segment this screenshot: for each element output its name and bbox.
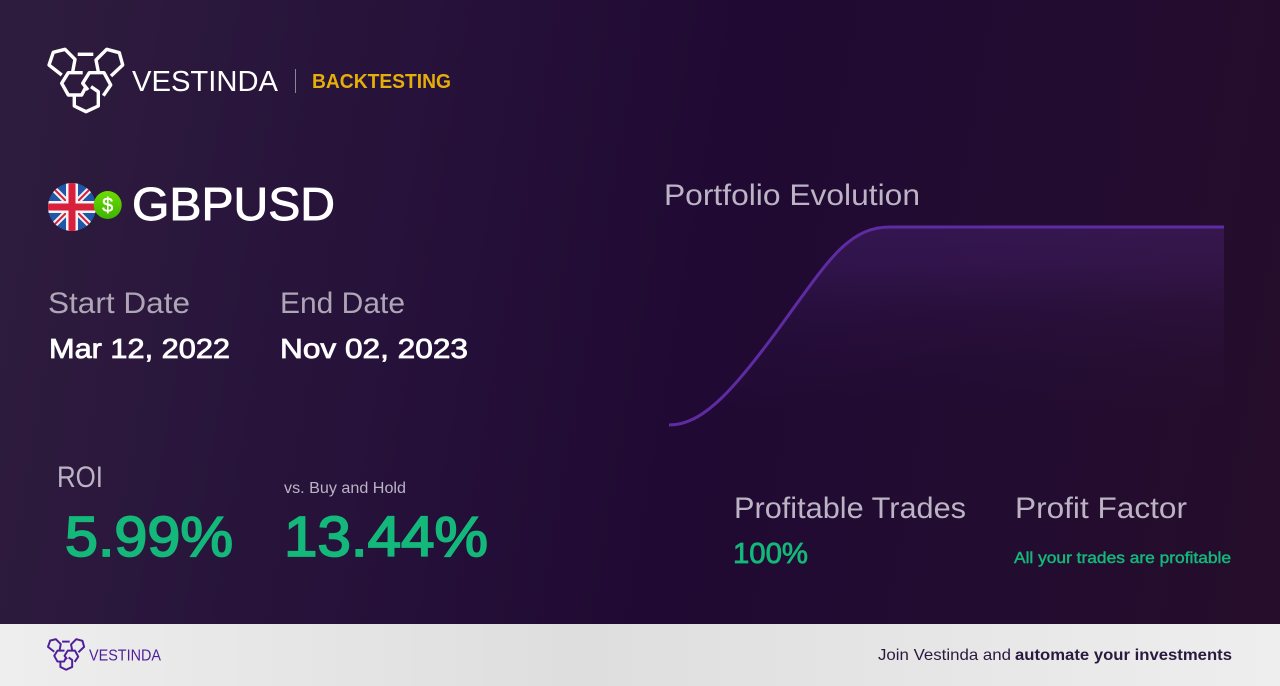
- profit factor label: Profit Factor: [1015, 492, 1187, 525]
- brand name: VESTINDA: [132, 66, 279, 98]
- ROI value: 5.99%: [65, 505, 233, 569]
- chart title: Portfolio Evolution: [664, 179, 920, 212]
- footer call to action emphasis: automate your investments: [1015, 647, 1232, 664]
- chart: portfolio evolution: [664, 179, 1224, 425]
- start date value: Mar 12, 2022: [49, 333, 230, 364]
- ROI stats: [57, 461, 488, 569]
- icon: footer logo: [48, 639, 84, 670]
- footer band: [0, 624, 1280, 686]
- start date label: Start Date: [48, 287, 190, 320]
- chart line: [669, 227, 1224, 425]
- header: [49, 49, 451, 112]
- profitable trades value: 100%: [733, 538, 808, 570]
- footer call to action: Join Vestinda and: [878, 647, 1011, 664]
- trade stats: [733, 492, 1231, 570]
- footer brand name: VESTINDA: [89, 648, 161, 664]
- buy and hold value: 13.44%: [284, 505, 488, 569]
- asset ticker: GBPUSD: [132, 178, 335, 230]
- divider: [294, 69, 296, 93]
- icon: dollar coin: [94, 191, 122, 219]
- chart area fill: [669, 227, 1224, 425]
- asset block: [48, 178, 335, 231]
- ROI label: ROI: [57, 461, 103, 494]
- end date label: End Date: [280, 287, 405, 320]
- icon: UK flag: [48, 183, 96, 231]
- profit factor note: All your trades are profitable: [1014, 550, 1231, 567]
- end date value: Nov 02, 2023: [280, 333, 468, 364]
- buy and hold label: vs. Buy and Hold: [284, 480, 406, 497]
- icon: dollar coin: $: [102, 195, 113, 217]
- profitable trades label: Profitable Trades: [734, 492, 966, 525]
- icon: Vestinda logo: [49, 49, 123, 112]
- section label: BACKTESTING: [312, 71, 451, 93]
- dates: [48, 287, 468, 364]
